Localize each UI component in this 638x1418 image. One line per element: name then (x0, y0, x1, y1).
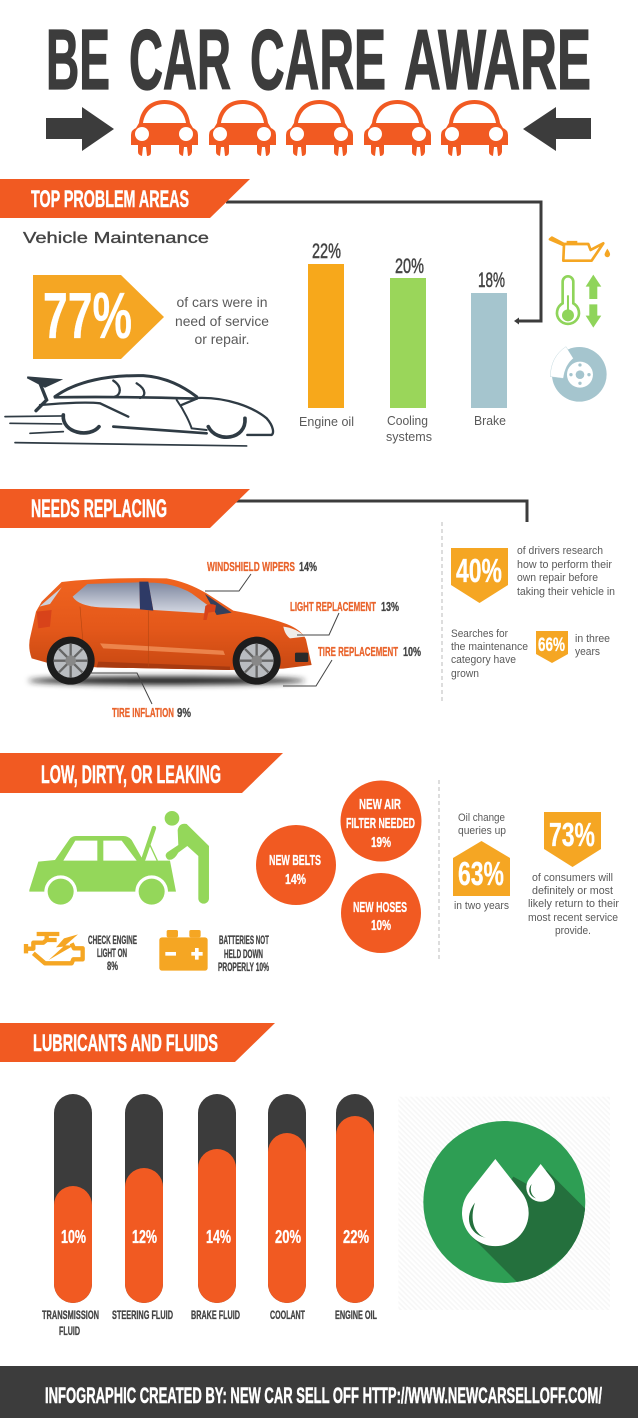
connector arrow from heading to bars (226, 202, 541, 324)
title: CAR (129, 13, 231, 108)
gauge: coolant 20 percent: 20% (275, 1227, 301, 1247)
icon: person checking car engine (29, 811, 209, 908)
bar: cooling systems 20 percent: 20% (395, 255, 424, 278)
heading: lubricants and fluids: LUBRICANTS AND FLUIDS (33, 1030, 218, 1057)
bar: engine oil 22 percent (299, 240, 354, 429)
heading: lubricants and fluids (0, 1023, 275, 1062)
icon: brake disc (550, 347, 607, 402)
label: tire inflation 9 percent: TIRE INFLATION (112, 705, 174, 720)
icon: green circle with fluid drops (423, 1121, 586, 1283)
circle: new air filter needed 19 percent: FILTER NEEDED (346, 815, 415, 832)
gauge: coolant 20 percent: COOLANT (270, 1308, 305, 1322)
circle: new hoses 10 percent: NEW HOSES (353, 899, 407, 916)
label: light replacement 13 percent: 13% (381, 599, 399, 614)
callout: 73 percent of consumers (528, 812, 619, 937)
callout: 73 percent of consumers: likely return to their (528, 898, 619, 910)
heading: low, dirty, or leaking: LOW, DIRTY, OR LEAKING (41, 761, 221, 789)
label: tire replacement 10 percent: TIRE REPLACEMENT (318, 644, 398, 659)
text: batteries not held down properly 10 percent (218, 933, 269, 974)
circle: new hoses 10 percent (341, 873, 421, 953)
callout: searches grown 66 percent (451, 628, 610, 680)
callout: 73 percent of consumers: definitely or most (532, 885, 613, 897)
icon: left arrow (46, 107, 114, 151)
callout: searches grown 66 percent: grown (451, 668, 479, 680)
panel: top problem areas (0, 179, 610, 446)
gauge: transmission fluid 10 percent: FLUID (59, 1324, 80, 1338)
gauge: engine oil 22 percent (335, 1094, 377, 1322)
label: light replacement 13 percent (290, 599, 399, 635)
bar: brake 18 percent: Brake (474, 413, 506, 428)
label: windshield wipers 14 percent (205, 559, 317, 591)
text: check engine light on 8 percent: LIGHT ON (97, 946, 127, 960)
bar: cooling systems 20 percent (386, 255, 432, 444)
text: of cars in need of service: of cars were in (176, 294, 268, 310)
circle: new belts 14 percent: NEW BELTS (269, 852, 321, 869)
circle: new belts 14 percent (256, 825, 336, 905)
callout: 40 percent of drivers (451, 545, 615, 603)
icon: battery (159, 930, 208, 971)
footer (0, 1366, 638, 1418)
title icon row: arrows and cars (46, 100, 591, 156)
callout: oil change queries 63 percent: queries up (458, 825, 506, 837)
gauge: steering fluid 12 percent: 12% (132, 1227, 157, 1247)
label: tire inflation 9 percent: 9% (177, 705, 191, 720)
heading: low, dirty, or leaking (0, 753, 283, 793)
label: tire inflation 9 percent (90, 673, 191, 720)
callout: 40 percent of drivers: own repair before (517, 572, 598, 584)
circle: new belts 14 percent: 14% (285, 871, 306, 888)
gauge: steering fluid 12 percent (112, 1094, 173, 1322)
callout: 40 percent of drivers: 40% (456, 552, 502, 589)
gauge: transmission fluid 10 percent: TRANSMISSION (42, 1308, 99, 1322)
gauge: brake fluid 14 percent: BRAKE FLUID (191, 1308, 240, 1322)
label: tire replacement 10 percent: 10% (403, 644, 421, 659)
dashed divider (441, 522, 443, 703)
label: light replacement 13 percent: LIGHT REPLACEMENT (290, 599, 376, 614)
label: windshield wipers 14 percent: WINDSHIELD WIPERS (207, 559, 295, 574)
gauge: transmission fluid 10 percent (42, 1094, 99, 1338)
gauge: engine oil 22 percent: 22% (343, 1227, 369, 1247)
subheading: vehicle maintenance: Vehicle Maintenance (23, 230, 209, 247)
callout: searches grown 66 percent: 66% (538, 635, 565, 656)
bar: cooling systems 20 percent: systems (386, 429, 432, 444)
callout: oil change queries 63 percent: in two years (454, 900, 509, 912)
icon: oil can (550, 238, 610, 261)
callout: searches grown 66 percent: years (575, 646, 600, 658)
gauge: engine oil 22 percent: ENGINE OIL (335, 1308, 377, 1322)
text: check engine light on 8 percent: CHECK ENGINE (88, 933, 137, 947)
title (46, 13, 591, 108)
circle: new air filter needed 19 percent: NEW AIR (359, 796, 401, 813)
bar: brake 18 percent: 18% (478, 269, 505, 292)
callout: 73 percent of consumers: provide. (555, 925, 591, 937)
circle: new hoses 10 percent: 10% (371, 917, 391, 934)
panel: needs replacing (0, 489, 615, 720)
heading: needs replacing (0, 489, 250, 528)
gauge: transmission fluid 10 percent: 10% (61, 1227, 86, 1247)
heading: needs replacing: NEEDS REPLACING (31, 495, 167, 523)
callout: oil change queries 63 percent: Oil change (458, 812, 505, 824)
text: of cars in need of service (175, 294, 269, 347)
title: BE (46, 13, 110, 108)
callout: searches grown 66 percent: the maintenance (451, 641, 528, 653)
bar: engine oil 22 percent: Engine oil (299, 414, 354, 429)
callout: 40 percent of drivers: taking their vehicle in (517, 586, 615, 598)
icon: right arrow (523, 107, 591, 151)
bar: brake 18 percent (471, 269, 507, 428)
heading: top problem areas: TOP PROBLEM AREAS (31, 186, 189, 213)
gauge: coolant 20 percent (268, 1094, 306, 1322)
text: batteries not held down properly 10 percent: HELD DOWN (224, 947, 263, 961)
label: windshield wipers 14 percent: 14% (299, 559, 317, 574)
label: tire replacement 10 percent (283, 644, 421, 686)
text: check engine light on 8 percent: 8% (107, 959, 118, 973)
callout: searches grown 66 percent: in three (575, 633, 610, 645)
gauge: brake fluid 14 percent: 14% (206, 1227, 231, 1247)
icon: five orange cars (131, 100, 508, 156)
connector line (235, 501, 527, 522)
callout: searches grown 66 percent: Searches for (451, 628, 508, 640)
callout: 73 percent of consumers: most recent service (528, 912, 618, 924)
dashed divider (438, 780, 440, 962)
illustration: sports car sketch (5, 376, 273, 446)
text: batteries not held down properly 10 percent: PROPERLY 10% (218, 960, 269, 974)
callout: searches grown 66 percent: category have (451, 654, 516, 666)
bar: cooling systems 20 percent: Cooling (387, 413, 428, 428)
title: CARE (250, 13, 386, 108)
circle: new air filter needed 19 percent (340, 780, 422, 862)
callout: 77 percent: 77% (43, 279, 132, 352)
callout: 40 percent of drivers: how to perform their (517, 559, 612, 571)
callout: oil change queries 63 percent: 63% (458, 855, 504, 892)
panel: low, dirty, or leaking (0, 753, 619, 974)
callout: 40 percent of drivers: of drivers research (517, 545, 603, 557)
heading: top problem areas (0, 179, 250, 218)
callout: 73 percent of consumers: 73% (549, 816, 595, 853)
text: of cars in need of service: or repair. (194, 331, 250, 347)
text: of cars in need of service: need of service (175, 313, 269, 329)
icon: thermometer with arrows (557, 275, 601, 328)
callout: oil change queries 63 percent (453, 812, 510, 912)
text: batteries not held down properly 10 percent: BATTERIES NOT (219, 933, 269, 947)
circle: new air filter needed 19 percent: 19% (371, 834, 391, 851)
icon: check engine light (26, 934, 83, 963)
bar: engine oil 22 percent: 22% (312, 240, 341, 263)
callout: 73 percent of consumers: of consumers will (532, 872, 613, 884)
bar chart: problem areas (299, 240, 507, 444)
text: check engine light on 8 percent (88, 933, 137, 973)
panel: lubricants and fluids (0, 1023, 610, 1338)
illustration: orange hatchback car (28, 578, 312, 685)
gauge: brake fluid 14 percent (191, 1094, 240, 1322)
gauge: steering fluid 12 percent: STEERING FLUID (112, 1308, 173, 1322)
